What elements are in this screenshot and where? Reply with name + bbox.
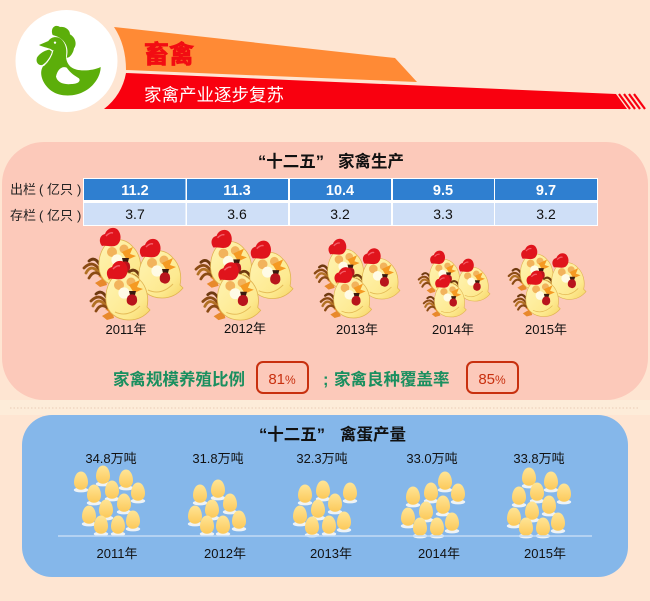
data table xyxy=(83,178,598,226)
heading: production: “十二五” xyxy=(258,153,324,171)
data table: 3.2 xyxy=(330,206,350,222)
heading: 畜禽: 畜禽 xyxy=(144,41,194,69)
data table: 9.7 xyxy=(536,183,556,199)
egg output values: 32.3万吨 xyxy=(296,451,348,466)
stat: improved breed coverage: 85% xyxy=(478,371,506,388)
year labels: 2013年 xyxy=(336,322,378,337)
stat: scale farming ratio: 家禽规模养殖比例 xyxy=(113,369,245,389)
egg year labels: 2014年 xyxy=(418,546,460,561)
subtitle: 家禽产业逐步复苏 xyxy=(144,85,284,105)
data table: 11.3 xyxy=(223,183,251,199)
row labels xyxy=(10,182,81,223)
egg output values xyxy=(85,451,565,466)
data table: 9.5 xyxy=(433,183,453,199)
egg year labels: 2013年 xyxy=(310,546,352,561)
eggs 2011 xyxy=(74,466,145,536)
row labels: ) xyxy=(77,182,81,197)
year labels: 2011年 xyxy=(106,322,146,337)
stat: improved breed coverage xyxy=(323,362,518,393)
chickens 2015 xyxy=(509,245,586,317)
eggs 2012 xyxy=(188,480,246,536)
chickens 2011 xyxy=(84,228,183,320)
eggs 2015 xyxy=(507,468,571,538)
egg output values: 31.8万吨 xyxy=(192,451,244,466)
heading: eggs: “十二五” xyxy=(259,426,325,444)
stat: improved breed coverage: 家禽良种覆盖率 xyxy=(334,369,450,389)
row labels: ( xyxy=(39,182,44,197)
panel: egg production xyxy=(22,415,628,577)
year labels xyxy=(106,321,567,337)
stat: scale farming ratio xyxy=(113,362,308,393)
year labels: 2012年 xyxy=(224,321,266,336)
row labels: 存栏 xyxy=(10,208,36,223)
egg output values: 33.0万吨 xyxy=(406,451,458,466)
data table: 3.2 xyxy=(536,206,556,222)
egg year labels xyxy=(97,546,566,561)
row labels: 亿只 xyxy=(47,208,73,223)
egg year labels: 2015年 xyxy=(524,546,566,561)
egg year labels: 2012年 xyxy=(204,546,246,561)
year labels: 2015年 xyxy=(525,322,567,337)
panel: poultry production xyxy=(2,142,648,400)
heading: production: 家禽生产 xyxy=(338,151,404,171)
heading: eggs: 禽蛋产量 xyxy=(340,425,406,444)
banner: orange ribbon with heading xyxy=(114,27,417,82)
chickens 2014 xyxy=(419,251,490,317)
data table: 10.4 xyxy=(326,183,354,199)
banner: red ribbon with subtitle xyxy=(104,73,645,109)
row labels: 出栏 xyxy=(10,182,36,197)
row labels: 亿只 xyxy=(47,182,73,197)
eggs 2014 xyxy=(401,472,465,538)
eggs 2013 xyxy=(293,480,357,537)
egg output values: 33.8万吨 xyxy=(513,451,565,466)
stat: scale farming ratio: 81% xyxy=(268,371,296,388)
icon: green rooster logo xyxy=(16,10,118,112)
data table: 3.6 xyxy=(227,206,247,222)
data table: 11.2 xyxy=(121,183,149,199)
egg year labels: 2011年 xyxy=(97,546,137,561)
data table: 3.7 xyxy=(125,206,145,222)
year labels: 2014年 xyxy=(432,322,474,337)
stat: improved breed coverage: ; xyxy=(323,371,328,389)
chickens 2013 xyxy=(315,239,400,318)
row labels: ) xyxy=(77,208,81,223)
row labels: ( xyxy=(39,208,44,223)
egg output values: 34.8万吨 xyxy=(85,451,137,466)
data table: 3.3 xyxy=(433,206,453,222)
chickens 2012 xyxy=(196,230,293,320)
